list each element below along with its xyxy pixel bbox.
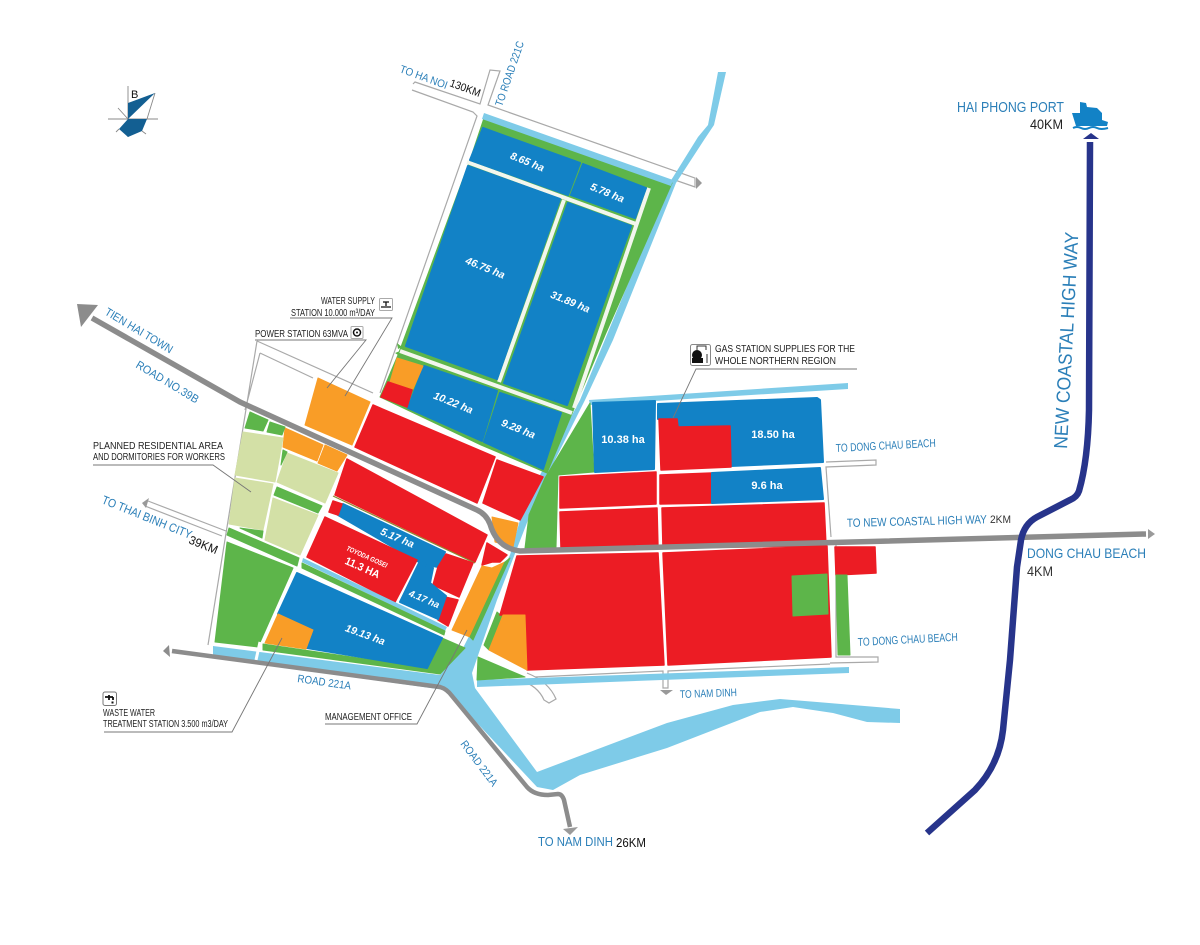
plot 9.28 ha: 9.28 ha bbox=[499, 417, 537, 442]
orange block east of canal bbox=[489, 615, 527, 670]
zone: east plots bbox=[489, 398, 876, 670]
icon: ship bbox=[1072, 102, 1108, 129]
label: Road No.39B: ROAD NO.39B bbox=[133, 359, 201, 406]
icon: compass bbox=[108, 86, 158, 137]
green strip 1 bbox=[274, 487, 322, 513]
orange block north bbox=[390, 358, 423, 389]
plot 18.50 ha: 18.50 ha bbox=[751, 429, 796, 441]
callout: gas station: WHOLE NORTHERN REGION bbox=[715, 356, 836, 367]
plot 5.78 ha: 5.78 ha bbox=[588, 181, 626, 206]
arrowhead Tien Hai bbox=[77, 304, 98, 327]
icon: gas tank bbox=[690, 344, 710, 366]
callout: water supply station: WATER SUPPLY bbox=[321, 296, 375, 307]
gas station red block bbox=[659, 419, 731, 470]
callout: management office: MANAGEMENT OFFICE bbox=[325, 712, 412, 723]
red block E3 bbox=[660, 473, 712, 504]
green strip south bbox=[302, 563, 445, 635]
label: To Dong Chau Beach upper: TO DONG CHAU BEACH bbox=[836, 438, 936, 455]
green belt below plot bbox=[263, 638, 465, 674]
large green park bbox=[215, 542, 293, 647]
red block E1 bbox=[560, 472, 656, 508]
label: Hai Phong Port: 40KM bbox=[1030, 116, 1063, 132]
plot 9.6 ha bbox=[712, 468, 823, 503]
highway: new coastal bbox=[927, 133, 1099, 833]
callout: gas station: GAS STATION SUPPLIES FOR THE bbox=[715, 344, 855, 355]
label: Dong Chau Beach: 4KM bbox=[1027, 563, 1053, 579]
callout: waste water treatment: TREATMENT STATION 3.500 m3/DAY bbox=[103, 719, 228, 730]
label: New Coastal High Way: NEW COASTAL HIGH WAY bbox=[1051, 231, 1083, 449]
callout: gas station bbox=[673, 344, 857, 418]
zone: west side bbox=[215, 378, 370, 647]
green block by canal bbox=[525, 403, 594, 548]
plot 18.50 ha bbox=[658, 398, 823, 466]
label: To New Coastal High Way: 2KM bbox=[990, 514, 1011, 526]
plot 5.17 ha: 5.17 ha bbox=[378, 526, 416, 551]
canal: north branch bbox=[589, 383, 848, 405]
red block E2 bbox=[560, 508, 658, 548]
red block north bbox=[381, 382, 412, 407]
green strip by canal bbox=[470, 558, 510, 640]
label: Dong Chau Beach bbox=[1027, 545, 1146, 579]
canal: main north-south waterway bbox=[430, 72, 900, 790]
label: To Dong Chau Beach lower: TO DONG CHAU BEACH bbox=[858, 632, 958, 649]
orange power station block bbox=[305, 378, 370, 445]
callout: waste water treatment bbox=[103, 638, 282, 732]
label: To Ha Noi 130KM: TO HA NOI bbox=[398, 64, 449, 92]
plot 10.38 ha: 10.38 ha bbox=[601, 434, 646, 446]
plot 46.75 ha bbox=[406, 166, 560, 379]
internal roads north bbox=[400, 162, 649, 413]
arrow: Road 221C east bbox=[696, 177, 702, 189]
plot 10.38 ha bbox=[593, 401, 655, 472]
residential block 3 bbox=[229, 478, 273, 530]
callout: power station bbox=[255, 326, 366, 388]
green small wedge bbox=[281, 450, 287, 465]
arrowhead west bbox=[163, 645, 170, 657]
label: Road 221A west: ROAD 221A bbox=[297, 673, 352, 693]
plot Toyoda Gosei 11.3 HA: TOYODA GOSEI bbox=[345, 545, 389, 570]
callout: management office bbox=[325, 630, 467, 724]
arrow: To Nam Dinh bbox=[660, 690, 673, 695]
arrowhead bbox=[1083, 133, 1099, 139]
road: 221A bbox=[163, 645, 578, 835]
canal: along road 221A bbox=[213, 646, 445, 690]
plot 4.17 ha bbox=[400, 563, 446, 619]
orange utility block bbox=[492, 517, 518, 547]
green strip 2 bbox=[227, 528, 299, 566]
icon: compass: B bbox=[131, 89, 138, 101]
label: To Road 221C: TO ROAD 221C bbox=[493, 40, 527, 108]
arrowhead south bbox=[563, 827, 578, 835]
canal strip above south green bbox=[302, 558, 447, 631]
icon: power bbox=[351, 326, 363, 338]
big red block west bbox=[500, 553, 664, 670]
green wedge east of canal bbox=[484, 612, 503, 650]
icon: tap bbox=[103, 692, 116, 706]
plot 4.17 ha: 4.17 ha bbox=[406, 588, 441, 611]
junction triangles bbox=[395, 343, 402, 355]
plot 19.13 ha bbox=[278, 573, 442, 668]
label: To Ha Noi 130KM: 130KM bbox=[448, 78, 482, 100]
callout: planned residential area: PLANNED RESIDENTIAL AREA bbox=[93, 441, 223, 452]
plot 19.13 ha: 19.13 ha bbox=[343, 622, 387, 648]
olive boundary line bbox=[333, 496, 475, 563]
callout: water supply station bbox=[290, 296, 392, 396]
orange block west 1 bbox=[283, 428, 323, 461]
label: To Nam Dinh short: TO NAM DINH bbox=[680, 687, 737, 701]
factory block A bbox=[355, 405, 495, 503]
plot 31.89 ha bbox=[504, 203, 631, 405]
road: No.39B and coastal connection bbox=[77, 304, 1155, 551]
red block far east bbox=[835, 547, 876, 575]
green strip far east bbox=[836, 575, 850, 655]
factory block C bbox=[335, 459, 487, 562]
plot 10.22 ha bbox=[408, 366, 497, 441]
orange block west 2 bbox=[318, 445, 347, 471]
green south-east wedge bbox=[477, 657, 525, 680]
plot 10.22 ha: 10.22 ha bbox=[432, 390, 475, 417]
green sliver bbox=[240, 528, 263, 538]
plot 8.65 ha: 8.65 ha bbox=[508, 150, 546, 175]
orange wastewater block bbox=[265, 614, 313, 649]
green block west 1 bbox=[245, 412, 268, 431]
zone: central red plots bbox=[307, 405, 543, 640]
plot 8.65 ha bbox=[470, 128, 580, 195]
green buffer north bbox=[380, 115, 672, 473]
callout: planned residential area: AND DORMITORIES FOR WORKERS bbox=[93, 452, 225, 463]
callout: power station: POWER STATION 63MVA bbox=[255, 329, 348, 340]
big red block east bbox=[663, 546, 831, 665]
canal: south branch bbox=[477, 667, 849, 687]
red block E4 bbox=[662, 503, 826, 548]
plot Toyoda Gosei 11.3 HA bbox=[307, 517, 417, 602]
factory block F bbox=[482, 543, 507, 565]
label: To Nam Dinh 26KM: TO NAM DINH bbox=[538, 834, 613, 849]
residential block 2 bbox=[277, 453, 338, 503]
label: To New Coastal High Way: TO NEW COASTAL HIGH WAY bbox=[847, 512, 987, 530]
factory block D bbox=[433, 554, 473, 597]
label: To Thai Binh City 39KM: TO THAI BINH CITY bbox=[100, 493, 194, 542]
small red marker bbox=[329, 501, 342, 515]
north canal strip bbox=[482, 113, 673, 186]
plot 46.75 ha: 46.75 ha bbox=[463, 255, 507, 282]
callout: waste water treatment: WASTE WATER bbox=[103, 708, 155, 719]
residential block 4 bbox=[265, 498, 318, 555]
plot 9.6 ha: 9.6 ha bbox=[751, 480, 783, 492]
label: Dong Chau Beach: DONG CHAU BEACH bbox=[1027, 545, 1146, 561]
label: Hai Phong Port bbox=[957, 99, 1064, 132]
factory block B bbox=[483, 460, 543, 520]
callout: water supply station: STATION 10.000 m³/DAY bbox=[291, 308, 375, 319]
label: Hai Phong Port: HAI PHONG PORT bbox=[957, 99, 1064, 116]
label: To Ha Noi 130KM bbox=[398, 64, 482, 100]
plot Toyoda Gosei 11.3 HA: 11.3 HA bbox=[343, 555, 382, 581]
label: Tien Hai Town: TIEN HAI TOWN bbox=[102, 306, 175, 356]
road outlines bbox=[145, 70, 878, 703]
label: To Nam Dinh 26KM: 26KM bbox=[616, 835, 646, 850]
green square bbox=[792, 574, 828, 616]
orange utility strip bbox=[452, 562, 505, 637]
zone: south west plots bbox=[256, 558, 525, 680]
plot 9.28 ha bbox=[484, 393, 561, 469]
plot 5.78 ha bbox=[571, 164, 646, 218]
arrow: Thai Binh bbox=[142, 498, 149, 508]
green block west 2 bbox=[267, 422, 285, 435]
zone: northern plots bbox=[380, 113, 673, 473]
plot 31.89 ha: 31.89 ha bbox=[549, 289, 592, 316]
label: Road 221A south: ROAD 221A bbox=[458, 739, 500, 789]
label: To Thai Binh City 39KM: 39KM bbox=[187, 533, 220, 557]
arrowhead coastal bbox=[1148, 529, 1155, 539]
residential block 1 bbox=[235, 432, 283, 482]
plot 5.17 ha bbox=[338, 504, 445, 567]
icon: water tap bbox=[380, 298, 392, 310]
white road across canal bbox=[256, 642, 260, 660]
callout: planned residential area bbox=[93, 441, 251, 492]
factory block E bbox=[438, 597, 458, 626]
